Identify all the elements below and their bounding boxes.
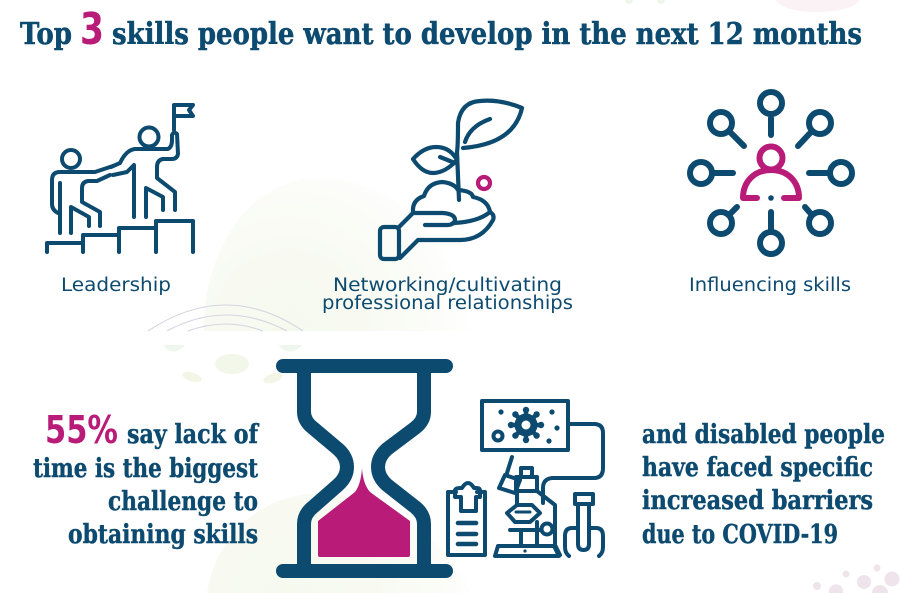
icon: clipboard bbox=[448, 483, 485, 555]
hourglass sand bbox=[318, 468, 410, 557]
title: Top bbox=[20, 17, 72, 52]
virus bbox=[508, 407, 544, 443]
label: networking bbox=[322, 275, 573, 314]
icon: microscope with virus screen bbox=[482, 401, 603, 556]
icon: hand holding a seedling bbox=[380, 101, 522, 259]
text: 55 percent lack of time bbox=[33, 408, 260, 550]
icon: leadership, two climbers with flag bbox=[47, 105, 193, 252]
text: 55 percent lack of time: time is the biggest bbox=[33, 454, 258, 484]
icon: test tube bbox=[565, 494, 603, 556]
text: disabled people barriers: due to COVID-19 bbox=[642, 520, 838, 550]
text: 55 percent lack of time: 55% bbox=[45, 408, 118, 452]
icon: influencing network around a person bbox=[690, 92, 852, 254]
label: networking: professional relationships bbox=[322, 293, 573, 314]
text: 55 percent lack of time: challenge to bbox=[108, 487, 258, 517]
text: 55 percent lack of time: say lack of bbox=[127, 420, 260, 450]
label: networking: Networking/cultivating bbox=[333, 275, 562, 296]
label: leadership: Leadership bbox=[61, 275, 171, 296]
icon: hourglass bbox=[283, 366, 446, 571]
title bbox=[20, 4, 862, 55]
label: influencing skills: Influencing skills bbox=[689, 275, 851, 296]
text: 55 percent lack of time: obtaining skills bbox=[68, 520, 258, 550]
screen bbox=[482, 401, 568, 450]
title: 3 bbox=[80, 4, 104, 55]
text: disabled people barriers bbox=[642, 420, 885, 550]
